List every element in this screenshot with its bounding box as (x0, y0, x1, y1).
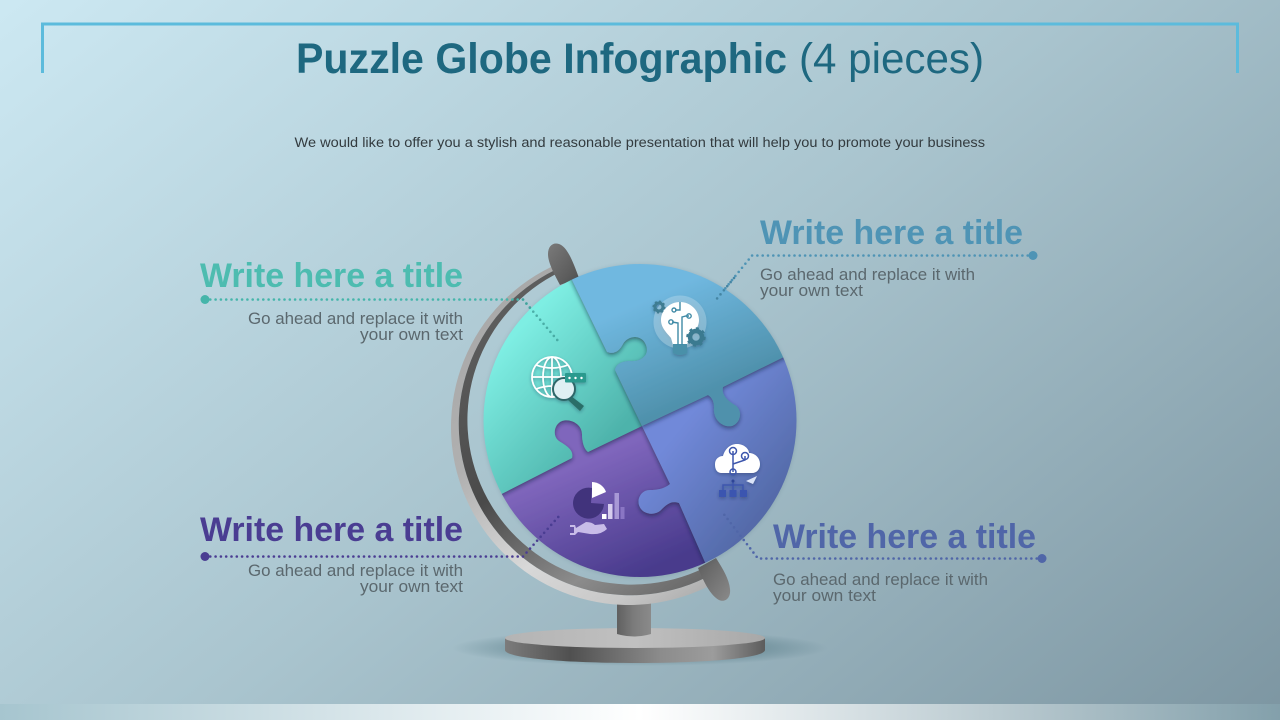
heading: Write here a title (200, 511, 463, 549)
globe rim shadow (484, 264, 796, 578)
small gear (654, 302, 664, 312)
top pin (548, 243, 579, 285)
body text: Go ahead and replace it with (248, 561, 463, 580)
body text: Go ahead and replace it with (760, 265, 975, 284)
bottom gradient bar (0, 704, 1280, 720)
large gear (688, 328, 704, 346)
body text: your own text (773, 586, 876, 605)
globe stand (451, 243, 828, 666)
dotted leader on globe: blue (715, 278, 734, 301)
puzzle globe (482, 264, 797, 578)
piece: teal (484, 280, 647, 498)
heading: Write here a title (200, 257, 463, 295)
dotted leader on globe: teal (523, 300, 559, 342)
piece: indigo (636, 358, 796, 564)
marker dot (1028, 251, 1038, 260)
icon: light bulb with gears (654, 296, 706, 355)
body text (248, 561, 463, 596)
dotted leader: indigo (723, 513, 1042, 558)
puzzle pieces (484, 264, 796, 577)
dotted leader: teal (205, 300, 559, 342)
dotted leader: purple (205, 515, 560, 556)
marker dot (1038, 554, 1046, 563)
meridian ring (451, 267, 707, 605)
subtitle: We would like to offer you a stylish and reasonable presentation that will help you to promote your business (294, 135, 985, 150)
body text: your own text (360, 325, 463, 344)
callout: purple (200, 511, 463, 596)
base disc (505, 628, 765, 663)
body text (773, 570, 988, 605)
heading: Write here a title (773, 518, 1036, 556)
base shadow (452, 630, 828, 666)
icon: globe with magnifier (532, 357, 586, 411)
icon: pie chart with hand (570, 482, 624, 535)
callout: teal (200, 257, 463, 344)
bottom pin (698, 558, 730, 601)
piece: blue (568, 264, 784, 431)
marker dot (200, 552, 210, 561)
marker dot (200, 295, 210, 304)
icon: cloud network (715, 444, 760, 497)
callout: indigo (773, 518, 1046, 605)
stem (617, 602, 651, 636)
body text (760, 265, 975, 300)
title bracket (42, 24, 1238, 73)
callout: blue (760, 214, 1038, 300)
dotted leader: blue (715, 256, 1033, 301)
body text: your own text (360, 577, 463, 596)
body text: Go ahead and replace it with (773, 570, 988, 589)
title: Puzzle Globe Infographic (296, 35, 787, 83)
heading: Write here a title (760, 214, 1023, 252)
body text (248, 309, 463, 344)
body text: your own text (760, 281, 863, 300)
piece: purple (502, 420, 706, 577)
title: (4 pieces) (799, 35, 984, 83)
body text: Go ahead and replace it with (248, 309, 463, 328)
